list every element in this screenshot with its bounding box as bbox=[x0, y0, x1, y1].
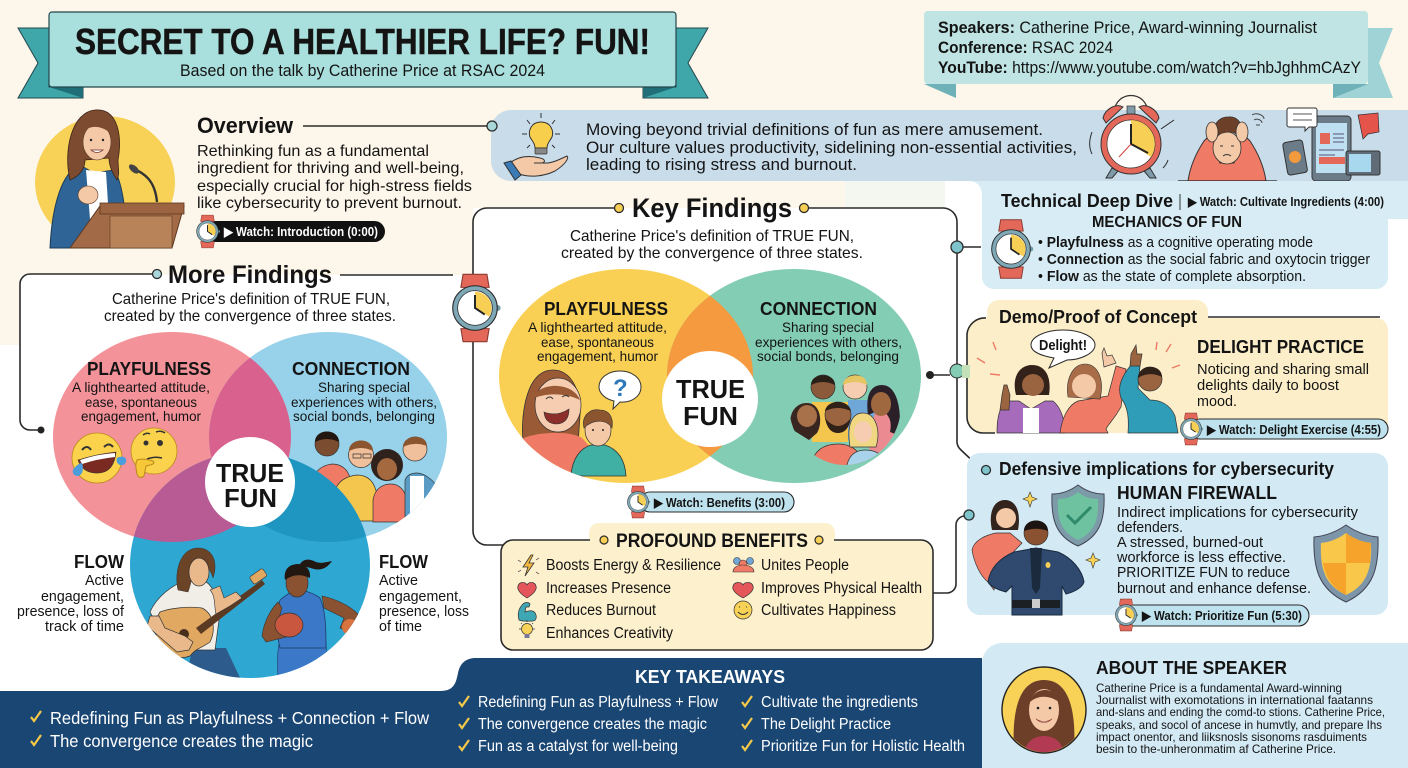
info box: speakers and links: Speakers: Catherine Price, Award-winning Journalist bbox=[938, 19, 1317, 37]
icon: muscle bbox=[518, 602, 536, 621]
speaker illustration at podium bbox=[35, 110, 184, 248]
watch pill: introduction: ▶ Watch: Introduction (0:00) bbox=[223, 224, 378, 239]
watch pill: delight exercise: ▶ Watch: Delight Exercise (4:55) bbox=[1206, 422, 1381, 437]
playfulness label: ease, spontaneous bbox=[541, 334, 654, 350]
mechanics list: • Connection as the social fabric and oxytocin trigger bbox=[1038, 252, 1370, 268]
true fun label: FUN bbox=[224, 483, 277, 513]
benefits list: column one: Boosts Energy & Resilience bbox=[546, 557, 721, 574]
key findings heading: Key Findings bbox=[632, 193, 792, 223]
problem band bbox=[487, 110, 1408, 181]
watch pill: benefits bbox=[627, 486, 794, 518]
overview heading: Overview bbox=[197, 113, 294, 138]
true fun label: FUN bbox=[683, 401, 738, 431]
benefits heading: PROFOUND BENEFITS bbox=[616, 531, 808, 552]
panel: key takeaways band bbox=[0, 658, 982, 768]
icon: large watch bbox=[453, 274, 501, 342]
overview text: like cybersecurity to prevent burnout. bbox=[197, 195, 462, 212]
overview text: especially crucial for high-stress fields bbox=[197, 178, 472, 195]
benefits list: column one: Increases Presence bbox=[546, 580, 671, 597]
playfulness label: PLAYFULNESS bbox=[544, 298, 668, 319]
left takeaways: Redefining Fun as Playfulness + Connection + Flow bbox=[50, 708, 429, 728]
delight text: mood. bbox=[1197, 393, 1237, 410]
human firewall text: Indirect implications for cybersecurity bbox=[1117, 505, 1359, 521]
playfulness label: A lighthearted attitude, bbox=[528, 319, 667, 335]
illustration: guitarist bbox=[147, 548, 267, 682]
flow label: right bbox=[379, 551, 469, 635]
connection label: social bonds, belonging bbox=[757, 348, 899, 364]
benefits list: column two: Unites People bbox=[761, 557, 849, 574]
flow label: left: track of time bbox=[45, 619, 124, 635]
about text: and-slans and ending the comd-to stions. Catherine Price, bbox=[1096, 705, 1385, 719]
playfulness label: A lighthearted attitude, bbox=[72, 379, 210, 395]
mechanics list bbox=[1038, 235, 1370, 285]
chart: more findings venn bbox=[53, 332, 447, 682]
more findings intro: created by the convergence of three states. bbox=[104, 308, 396, 325]
flow label: left: presence, loss of bbox=[17, 604, 125, 620]
delight heading: DELIGHT PRACTICE bbox=[1197, 337, 1364, 357]
flow label: left: engagement, bbox=[41, 589, 124, 605]
flow label: right: of time bbox=[379, 619, 422, 635]
panel: profound benefits bbox=[501, 523, 933, 650]
icon: technical watch bbox=[992, 220, 1033, 278]
takeaways column two: Prioritize Fun for Holistic Health bbox=[761, 738, 965, 755]
human firewall text: PRIORITIZE FUN to reduce bbox=[1117, 565, 1290, 581]
panel: demo proof of concept bbox=[950, 300, 1388, 433]
flow label: left: Active bbox=[85, 573, 124, 589]
key findings frame connectors bbox=[473, 204, 981, 593]
subtitle: Based on the talk by Catherine Price at RSAC 2024 bbox=[180, 62, 545, 80]
left takeaways bbox=[31, 708, 429, 751]
human firewall text: workforce is less effective. bbox=[1116, 550, 1286, 566]
playfulness label bbox=[528, 298, 668, 364]
about text: besin to the-unheronmatim af Catherine Price. bbox=[1096, 742, 1336, 756]
human firewall text bbox=[1116, 505, 1359, 597]
illustration: basketball player bbox=[262, 560, 358, 682]
panel: defensive implications bbox=[964, 453, 1388, 615]
illustration: connection friends bbox=[314, 432, 437, 522]
playfulness label: PLAYFULNESS bbox=[87, 358, 211, 379]
about heading: ABOUT THE SPEAKER bbox=[1096, 657, 1287, 678]
connection label: CONNECTION bbox=[292, 358, 410, 379]
panel: technical deep dive bbox=[968, 181, 1408, 289]
playfulness label: ease, spontaneous bbox=[85, 394, 197, 410]
info box: speakers and links: YouTube: https://www.youtube.com/watch?v=hbJghhmCAzY bbox=[938, 59, 1361, 77]
watch pill: prioritize fun bbox=[1115, 599, 1309, 631]
takeaways column one bbox=[459, 694, 719, 755]
benefits list: column one bbox=[546, 557, 721, 642]
flow label: right: engagement, bbox=[379, 589, 462, 605]
connection label: Sharing special bbox=[318, 379, 410, 395]
icon: sparkles bbox=[1023, 492, 1100, 568]
true fun label bbox=[216, 458, 284, 513]
overview text bbox=[197, 143, 472, 212]
about text: Catherine Price is a fundamental Award-winning bbox=[1096, 681, 1342, 695]
icon: smile bbox=[734, 601, 752, 619]
illustration: woman and officer bbox=[972, 500, 1084, 615]
connection label: CONNECTION bbox=[760, 298, 877, 319]
about text: speaks, and socol of ancese in humvtly, and prepare Ihs bbox=[1096, 718, 1382, 732]
icon: heart bbox=[518, 582, 536, 598]
benefits list: column two bbox=[761, 557, 922, 619]
benefits list: column two: Improves Physical Health bbox=[761, 580, 922, 597]
mechanics list: • Playfulness as a cognitive operating mode bbox=[1038, 235, 1313, 251]
benefits list: column two: Cultivates Happiness bbox=[761, 602, 896, 619]
illustration: connection group bbox=[790, 374, 900, 465]
connection label: social bonds, belonging bbox=[293, 408, 435, 424]
human firewall text: defenders. bbox=[1117, 520, 1183, 536]
mechanics list: • Flow as the state of complete absorption. bbox=[1038, 269, 1306, 285]
problem text: leading to rising stress and burnout. bbox=[586, 156, 857, 174]
more findings intro: Catherine Price's definition of TRUE FUN, bbox=[112, 291, 390, 308]
overview section bbox=[197, 113, 487, 212]
takeaways column two: The Delight Practice bbox=[761, 716, 891, 733]
flow label: left bbox=[17, 551, 125, 635]
takeaways column two: Cultivate the ingredients bbox=[761, 694, 918, 711]
benefits list: column one: Reduces Burnout bbox=[546, 602, 657, 619]
icon: energy bbox=[518, 555, 539, 576]
illustration: laughing woman and thinking man bbox=[522, 370, 626, 476]
takeaways column one: Redefining Fun as Playfulness + Flow bbox=[478, 694, 719, 711]
info box: speakers and links: Conference: RSAC 2024 bbox=[938, 39, 1113, 57]
human firewall text: A stressed, burned-out bbox=[1117, 535, 1263, 551]
info box: speakers and links bbox=[924, 11, 1393, 98]
flow label: right: Active bbox=[379, 573, 418, 589]
demo heading: Demo/Proof of Concept bbox=[999, 306, 1197, 327]
illustration: cheering people bbox=[977, 342, 1180, 433]
more findings heading: More Findings bbox=[168, 261, 332, 289]
more findings intro bbox=[104, 291, 396, 325]
icon: yellow shield bbox=[1314, 525, 1378, 602]
human firewall text: burnout and enhance defense. bbox=[1117, 581, 1311, 597]
benefits list: column one: Enhances Creativity bbox=[546, 625, 673, 642]
icon: bulb bbox=[519, 620, 535, 638]
key findings intro bbox=[561, 228, 863, 262]
playfulness label bbox=[72, 358, 211, 424]
flow label: right: presence, loss bbox=[379, 604, 469, 620]
key findings intro: created by the convergence of three states. bbox=[561, 245, 863, 262]
icon: stressed person bbox=[1178, 114, 1277, 181]
technical watch link: ▶ Watch: Cultivate Ingredients (4:00) bbox=[1187, 195, 1384, 209]
takeaways column one: Fun as a catalyst for well-being bbox=[478, 738, 678, 755]
icon: thinking emoji bbox=[131, 428, 177, 477]
more findings frame bbox=[20, 270, 453, 434]
about text: impact onentor, and liiksnosls sisonoms rasduiments bbox=[1096, 730, 1367, 744]
icon: green shield bbox=[1052, 485, 1104, 546]
delight text bbox=[1197, 361, 1369, 410]
panel: about the speaker bbox=[982, 643, 1408, 768]
true fun label: TRUE bbox=[676, 374, 745, 404]
key findings intro: Catherine Price's definition of TRUE FUN, bbox=[570, 228, 854, 245]
flow label: left: FLOW bbox=[74, 551, 124, 572]
takeaways heading: KEY TAKEAWAYS bbox=[635, 666, 785, 687]
flow label: right: FLOW bbox=[379, 551, 428, 572]
problem text bbox=[586, 121, 1077, 174]
icon: alarm clock bbox=[1090, 96, 1174, 178]
icon: devices bbox=[1282, 108, 1380, 181]
delight text: Noticing and sharing small bbox=[1197, 361, 1369, 378]
icon: laughing emoji bbox=[72, 433, 126, 483]
problem text: Our culture values productivity, sidelining non-essential activities, bbox=[586, 139, 1077, 157]
connection label bbox=[755, 298, 902, 364]
title banner bbox=[18, 12, 708, 98]
human firewall heading: HUMAN FIREWALL bbox=[1117, 483, 1277, 503]
overview text: ingredient for thriving and well-being, bbox=[197, 160, 464, 177]
connection label bbox=[291, 358, 437, 424]
takeaways column one: The convergence creates the magic bbox=[478, 716, 707, 733]
true fun label bbox=[676, 374, 745, 431]
playfulness label: engagement, humor bbox=[81, 408, 201, 424]
overview text: Rethinking fun as a fundamental bbox=[197, 143, 429, 160]
chart: key findings venn bbox=[499, 269, 921, 488]
connection label: experiences with others, bbox=[755, 334, 902, 350]
speech bubble: question bbox=[599, 371, 641, 409]
takeaways column two bbox=[742, 694, 965, 755]
true fun label: TRUE bbox=[216, 458, 284, 488]
playfulness label: engagement, humor bbox=[537, 348, 658, 364]
icon: physical health bbox=[733, 582, 753, 598]
problem text: Moving beyond trivial definitions of fun as mere amusement. bbox=[586, 121, 1043, 139]
left takeaways: The convergence creates the magic bbox=[50, 731, 313, 751]
watch pill: delight exercise bbox=[1180, 413, 1388, 445]
technical heading: Technical Deep Dive bbox=[1001, 190, 1173, 211]
watch pill: introduction bbox=[197, 215, 385, 248]
defensive heading: Defensive implications for cybersecurity bbox=[999, 458, 1335, 479]
speech bubble: question: ? bbox=[613, 375, 628, 402]
watch pill: prioritize fun: ▶ Watch: Prioritize Fun (5:30) bbox=[1141, 608, 1302, 623]
icon: lightbulb and hand bbox=[504, 113, 568, 180]
connection label: Sharing special bbox=[782, 319, 874, 335]
speaker portrait bbox=[1002, 667, 1086, 753]
about text bbox=[1096, 681, 1385, 756]
delight text: delights daily to boost bbox=[1197, 377, 1340, 394]
watch pill: benefits: ▶ Watch: Benefits (3:00) bbox=[653, 495, 785, 510]
mechanics heading: MECHANICS OF FUN bbox=[1092, 214, 1242, 231]
title: SECRET TO A HEALTHIER LIFE? FUN! bbox=[75, 21, 650, 62]
about text: Journalist with exomotations in international faatanns bbox=[1096, 693, 1373, 707]
icon: people bbox=[733, 558, 754, 572]
connection label: experiences with others, bbox=[291, 394, 437, 410]
speech bubble: delight bbox=[1031, 330, 1095, 368]
speech bubble: delight: Delight! bbox=[1039, 337, 1087, 354]
